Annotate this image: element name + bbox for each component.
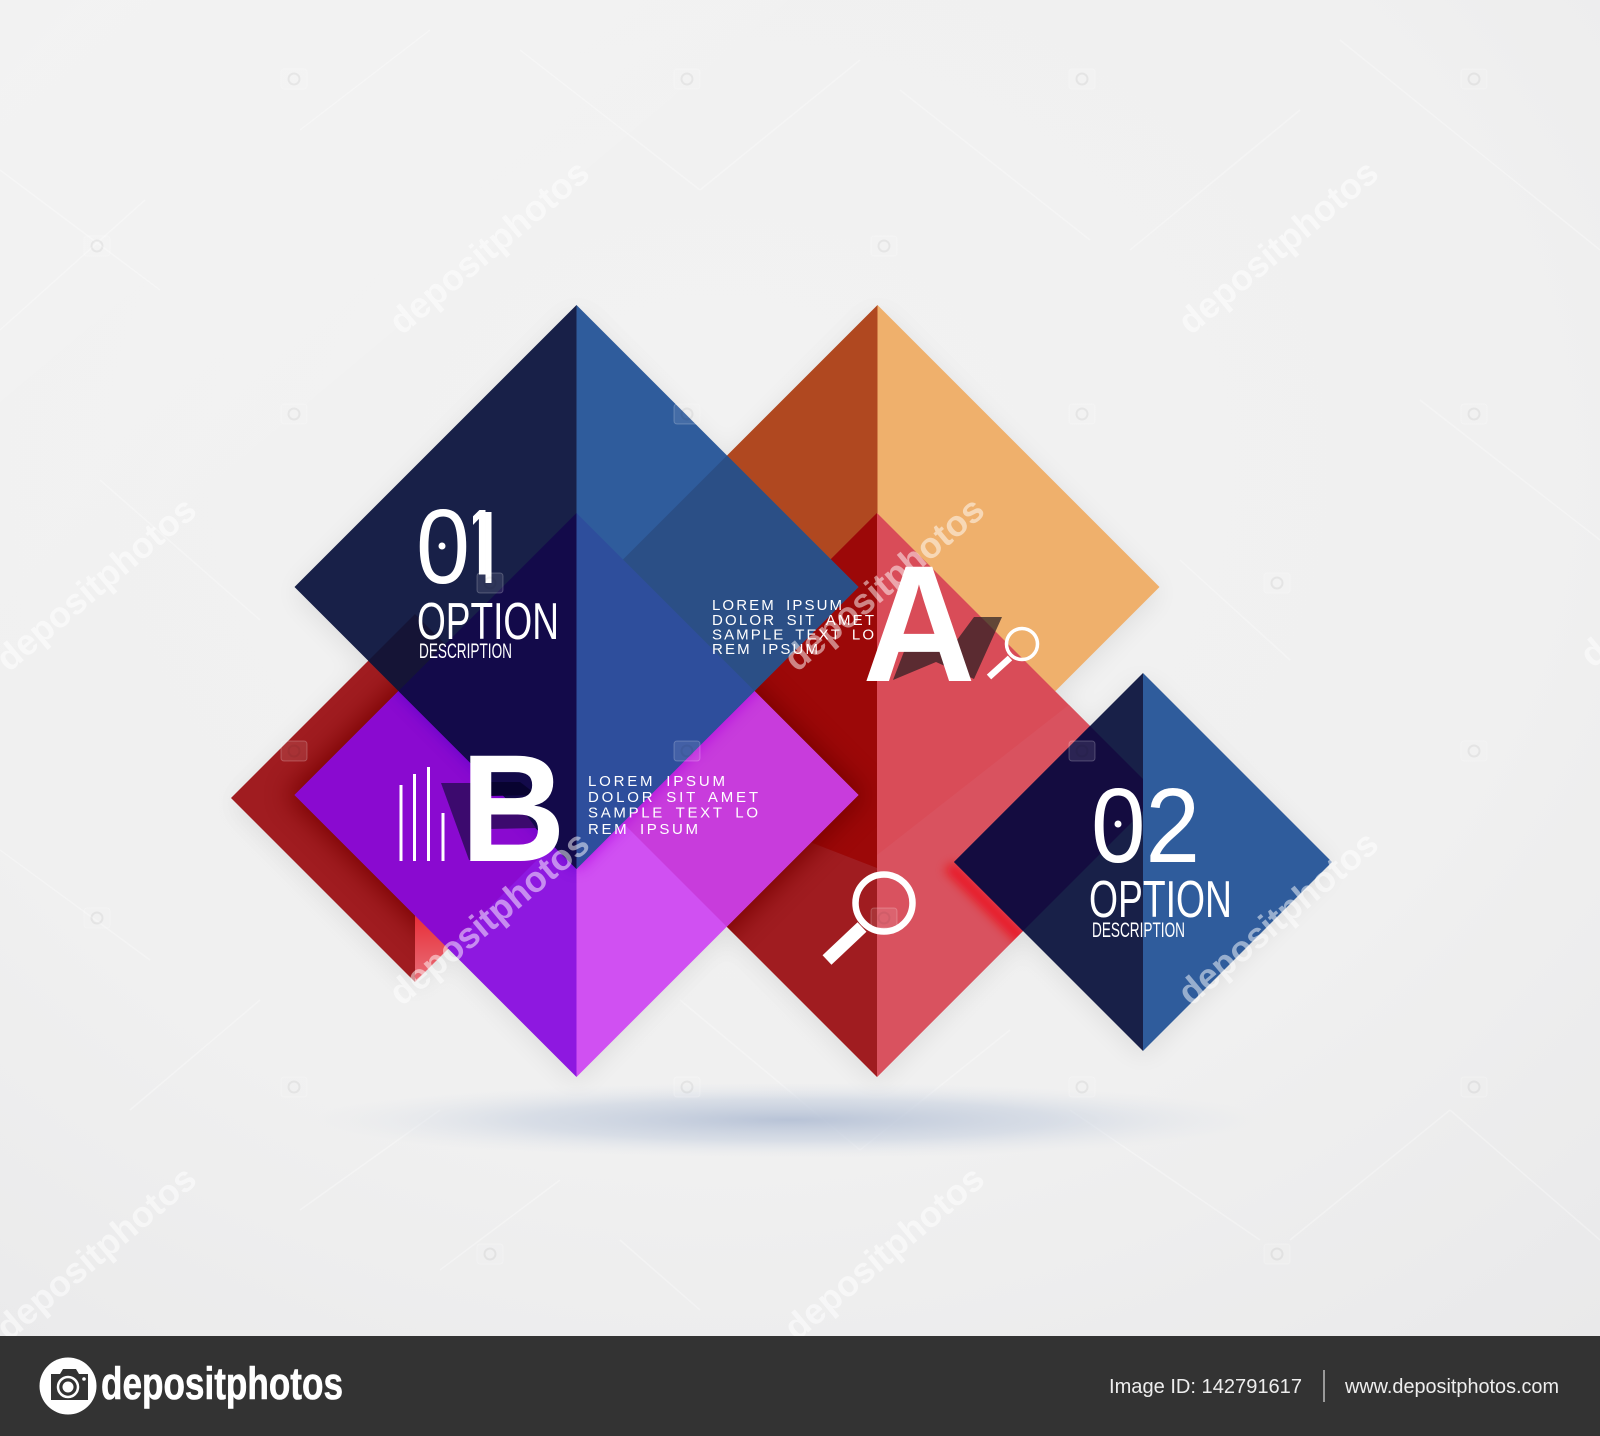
watermark text: depositphotos xyxy=(776,488,992,679)
text block: 01 option: 1 xyxy=(460,488,502,606)
ground shadow xyxy=(310,1082,1270,1158)
text block: 01 option: DESCRIPTION xyxy=(419,640,512,663)
diamond: navy 01 panel xyxy=(294,305,858,869)
watermark text: depositphotos xyxy=(381,151,597,342)
logo wordmark: depositphotos xyxy=(101,1358,343,1409)
icon: small magnifier xyxy=(989,628,1038,677)
text block: lorem ipsum B xyxy=(588,773,758,838)
text block: lorem ipsum A xyxy=(712,597,874,658)
text block: 02 option: OPTION xyxy=(1089,871,1232,929)
letter A with shadow: A xyxy=(862,532,976,717)
shadows cast on red panels xyxy=(284,620,1040,944)
text block: lorem ipsum B: DOLOR SIT AMET xyxy=(588,789,758,806)
diamond: dark red left back panel xyxy=(231,614,599,982)
diamond: blue 02 panel xyxy=(954,673,1332,1051)
site url: www.depositphotos.com xyxy=(1344,1375,1559,1398)
image id: Image ID: 142791617 xyxy=(1109,1375,1302,1398)
text block: lorem ipsum A: REM IPSUM xyxy=(712,641,818,658)
text block: lorem ipsum B: SAMPLE TEXT LO xyxy=(588,804,758,822)
letter B with shadow: B xyxy=(461,723,566,894)
text block: lorem ipsum B: LOREM IPSUM xyxy=(588,773,725,790)
text block: 01 option: OPTION xyxy=(417,593,559,651)
watermark text: depositphotos xyxy=(1170,151,1386,342)
footer bar xyxy=(0,1336,1600,1436)
text block: 01 option xyxy=(418,509,556,658)
diamond: red A panel xyxy=(726,513,1090,1077)
text block: lorem ipsum A: SAMPLE TEXT LO xyxy=(712,626,874,644)
watermark text: depositphotos xyxy=(381,822,597,1013)
icon: vertical bars xyxy=(400,767,444,861)
watermark text: depositphotos xyxy=(776,1157,992,1348)
diamond: orange A back panel xyxy=(596,305,1160,869)
watermark camera icons xyxy=(84,69,1487,1264)
text block: 02 option xyxy=(1089,767,1232,942)
text block: 01 option: 0 xyxy=(416,488,470,606)
text block: 02 option: 02 xyxy=(1091,767,1200,885)
watermark text: depositphotos xyxy=(1170,822,1386,1013)
icon: depositphotos logo xyxy=(40,1358,96,1414)
soft drop shadows under diamonds xyxy=(231,311,1332,1083)
footer divider xyxy=(1323,1370,1325,1402)
diamond: purple B panel xyxy=(294,691,858,1077)
text block: lorem ipsum A: LOREM IPSUM xyxy=(712,597,842,614)
text block: lorem ipsum B: REM IPSUM xyxy=(588,821,698,838)
text block: lorem ipsum A: DOLOR SIT AMET xyxy=(712,612,874,629)
icon: large magnifier xyxy=(827,874,912,960)
text block: 02 option: DESCRIPTION xyxy=(1092,919,1185,942)
